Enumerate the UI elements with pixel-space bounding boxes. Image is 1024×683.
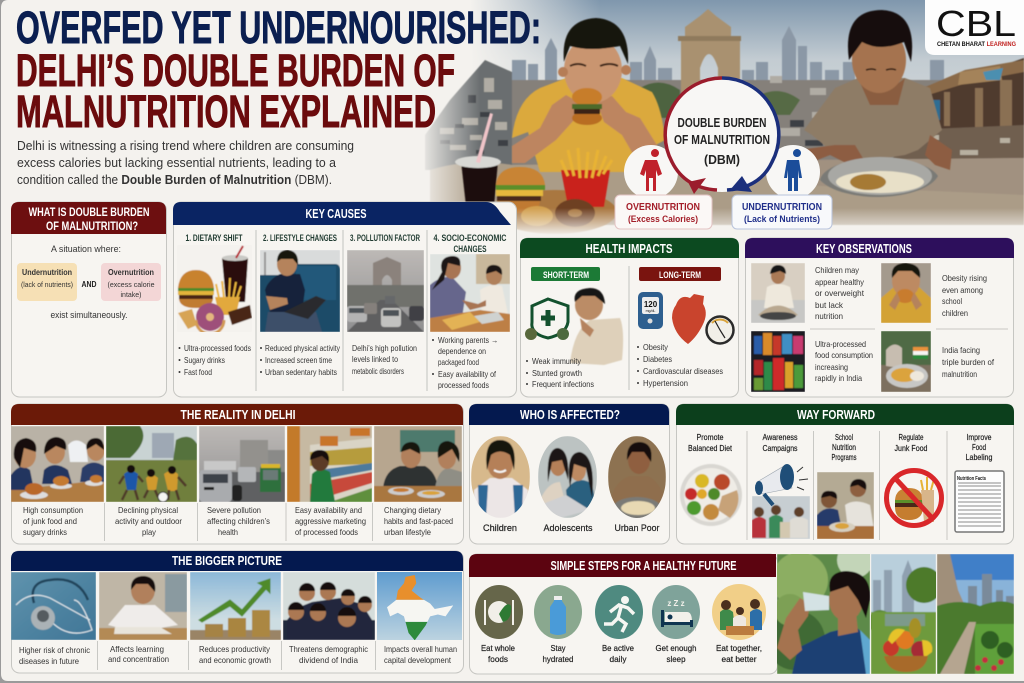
bullet list	[260, 343, 341, 377]
small circles	[624, 145, 820, 199]
junk food spread	[455, 113, 617, 234]
item: awareness campaigns: Campaigns	[762, 443, 798, 453]
title: OVERFED YET UNDERNOURISHED:	[16, 2, 541, 53]
portrait: adolescents: Adolescents	[544, 523, 593, 534]
captions: play	[142, 527, 157, 537]
captions: Severe pollution	[207, 505, 261, 515]
step: eat together: eat better	[722, 654, 757, 664]
overnutrition box: Overnutrition	[108, 267, 154, 277]
item: balanced diet	[680, 432, 742, 526]
observation: appear healthy: or overweight	[815, 288, 865, 298]
image: child in food store	[287, 426, 372, 502]
image: boy on tablet	[260, 250, 340, 332]
bullet list: packaged food	[438, 357, 479, 367]
observation: ultra-processed: food consumption	[815, 350, 873, 360]
bullet list: dependence on	[438, 346, 486, 356]
column: dietary shift: 1. DIETARY SHIFT	[186, 233, 243, 243]
undernutrition label: (Lack of Nutrients)	[744, 214, 820, 225]
bullet list	[637, 342, 723, 388]
captions: affecting children’s	[207, 516, 270, 526]
pollution text	[352, 343, 417, 376]
bullet list	[178, 343, 251, 377]
DBM diagram	[615, 78, 832, 229]
panel: what is double burden: OF MALNUTRITION?	[46, 221, 138, 233]
bullet list: processed foods	[438, 380, 489, 390]
captions: aggressive marketing	[295, 516, 366, 526]
image: smog and traffic	[347, 250, 424, 332]
boy undernourished	[798, 10, 952, 197]
column: pollution factor: 3. POLLUTION FACTOR	[350, 233, 420, 243]
step: stay hydrated: Stay	[550, 643, 566, 653]
boy overfed	[512, 18, 665, 172]
observation: appear healthy	[751, 263, 865, 323]
image: pollution and traffic	[199, 426, 285, 502]
distant skyline	[512, 26, 944, 92]
item: regulate junk food	[886, 432, 942, 526]
bullet list: Weak immunity	[532, 356, 582, 366]
city mass	[512, 80, 1024, 165]
bullet list: Frequent infections	[532, 379, 594, 389]
panel: simple steps: SIMPLE STEPS FOR A HEALTHY FUTURE	[550, 558, 737, 573]
pollution text: Delhi’s high pollution	[352, 343, 417, 353]
hero illustration	[418, 0, 1024, 236]
portrait: children	[471, 436, 530, 534]
pollution text: metabolic disorders	[352, 366, 404, 376]
bullet list	[526, 356, 594, 389]
item: regulate junk food: Regulate	[898, 432, 924, 442]
captions: of junk food and	[23, 516, 77, 526]
image: india map	[377, 572, 462, 640]
bullet list: Hypertension	[643, 378, 688, 388]
icon: nutrition label: Nutrition Facts	[957, 476, 986, 482]
item: awareness campaigns	[752, 432, 810, 539]
column: socio-economic changes: CHANGES	[454, 244, 486, 254]
short-term column	[525, 267, 623, 389]
panel: who is affected	[469, 404, 670, 544]
image: stethoscope	[11, 572, 96, 640]
image: parent and child	[430, 254, 510, 332]
title	[16, 2, 541, 137]
step: be active: daily	[610, 654, 627, 664]
column: lifestyle changes	[260, 233, 341, 377]
icon: food plate	[680, 464, 742, 526]
observation: triple burden: triple burden of	[942, 357, 995, 367]
india gate	[681, 9, 740, 93]
observation: ultra-processed	[751, 331, 873, 392]
undernutrition box: Undernutrition	[22, 267, 72, 277]
intro paragraph: condition called the Double Burden of Malnutrition (DBM).	[17, 173, 332, 187]
portrait: children: Children	[483, 523, 517, 534]
panel: health impacts: HEALTH IMPACTS	[586, 241, 673, 256]
item: regulate junk food: Junk Food	[894, 443, 928, 453]
observation: obesity in school: even among	[942, 285, 983, 295]
bullet list: Easy availability of	[438, 369, 496, 379]
logo: CHETAN BHARAT LEARNING	[937, 41, 1016, 48]
bullet list	[432, 335, 498, 390]
undernutrition label: UNDERNUTRITION	[742, 201, 822, 213]
captions: of processed foods	[295, 527, 358, 537]
observation: appear healthy: appear healthy	[815, 277, 865, 287]
captions	[23, 505, 453, 537]
step: stay hydrated	[534, 585, 582, 664]
panel: the reality in delhi: THE REALITY IN DELHI	[180, 407, 296, 422]
undernutrition box: (lack of nutrients)	[21, 280, 73, 289]
panel: what is double burden: exist simultaneously.	[50, 310, 128, 321]
bullet list: Sugary drinks	[184, 355, 225, 365]
observation: ultra-processed: increasing	[815, 362, 848, 372]
item: school nutrition	[817, 432, 874, 539]
column: socio-economic changes: 4. SOCIO-ECONOMIC	[434, 233, 507, 243]
undernutrition label	[732, 195, 832, 229]
panel: health impacts	[520, 238, 739, 397]
icon: megaphone	[755, 464, 808, 505]
captions: habits and fast-paced	[384, 516, 453, 526]
slum	[905, 58, 1024, 165]
captions	[19, 644, 457, 666]
panel: the bigger picture: THE BIGGER PICTURE	[172, 553, 282, 568]
captions: dividend of India	[299, 655, 358, 665]
image: child studying	[99, 572, 187, 640]
column: dietary shift	[177, 233, 252, 377]
step: enough sleep: Get enough	[656, 643, 697, 653]
long-term column: LONG-TERM	[659, 270, 701, 280]
panel: the bigger picture	[11, 551, 464, 673]
observation: appear healthy: but lack	[815, 300, 844, 310]
pollution text: levels linked to	[352, 354, 398, 364]
portrait: adolescents	[538, 436, 597, 534]
observation: ultra-processed: rapidly in India	[815, 373, 862, 383]
bullet list: Reduced physical activity	[265, 343, 341, 353]
panel: simple steps	[469, 554, 778, 674]
observation: appear healthy: nutrition	[815, 311, 843, 321]
observation: obesity in school: children	[942, 308, 968, 318]
image: children playing football	[106, 426, 197, 502]
observation: obesity in school	[881, 263, 987, 323]
panel: what is double burden: WHAT IS DOUBLE BURDEN	[28, 207, 150, 219]
step: eat whole foods: Eat whole	[481, 643, 515, 653]
image: school meal	[817, 472, 874, 539]
image: boy drinking water	[777, 554, 870, 674]
image: coins and growth arrow	[190, 572, 281, 640]
observation: appear healthy: Children may	[815, 265, 860, 275]
panel: what is double burden: AND	[82, 279, 96, 289]
panel: the reality in delhi	[11, 404, 464, 544]
overnutrition label: OVERNUTRITION	[626, 201, 700, 213]
DBM diagram: (DBM)	[704, 152, 740, 167]
image: junk food	[177, 245, 252, 332]
captions: activity and outdoor	[115, 516, 182, 526]
step: eat together: Eat together,	[716, 643, 762, 653]
item: awareness campaigns: Awareness	[762, 432, 798, 442]
step: eat whole foods: foods	[488, 654, 508, 664]
item: school nutrition: Programs	[832, 452, 856, 462]
panel: key observations: KEY OBSERVATIONS	[816, 241, 912, 256]
image: campaign group	[752, 496, 810, 539]
panel: key causes: KEY CAUSES	[306, 206, 367, 221]
bullet list: Ultra-processed foods	[184, 343, 251, 353]
step: be active	[595, 585, 643, 664]
step: stay hydrated: hydrated	[542, 654, 574, 664]
column: pollution factor	[347, 233, 424, 376]
DBM diagram: OF MALNUTRITION	[674, 132, 770, 147]
step: enough sleep: sleep	[666, 654, 686, 664]
item: food labeling: Food	[972, 442, 986, 452]
overnutrition box: (excess calorie	[108, 280, 154, 289]
observation: triple burden: malnutrition	[942, 369, 977, 379]
captions: urban lifestyle	[384, 527, 431, 537]
bullet list: Diabetes	[643, 354, 672, 364]
panel: key observations	[745, 238, 1014, 397]
captions: Threatens demographic	[289, 644, 369, 654]
observation: ultra-processed: Ultra-processed	[815, 339, 866, 349]
captions: sugary drinks	[23, 527, 67, 537]
panel: way forward	[676, 404, 1014, 544]
icon: no junk food	[886, 470, 942, 526]
intro paragraph	[17, 139, 354, 187]
captions: Easy availability and	[295, 505, 362, 515]
step: be active: Be active	[602, 643, 634, 653]
observation: obesity in school: Obesity rising	[942, 273, 987, 283]
item: food labeling: Improve	[966, 432, 992, 442]
undernutrition box	[17, 263, 77, 301]
bullet list: Cardiovascular diseases	[643, 366, 723, 376]
step: enough sleep	[652, 585, 700, 664]
overnutrition box	[101, 263, 161, 301]
logo: CBL	[936, 3, 1016, 44]
portrait: urban poor	[608, 436, 666, 534]
item: school nutrition: School	[835, 432, 853, 442]
panel: what is double burden: A situation where:	[51, 244, 121, 255]
panel: key causes	[173, 202, 516, 397]
image: family at table	[374, 426, 462, 502]
step: enough sleep: z Z z	[667, 599, 685, 608]
captions: Impacts overall human	[384, 644, 457, 654]
captions: and concentration	[108, 654, 169, 664]
captions: Declining physical	[118, 505, 178, 515]
short-term column: SHORT-TERM	[543, 270, 589, 280]
title: DELHI’S DOUBLE BURDEN OF	[16, 45, 455, 96]
bullet list: Stunted growth	[532, 368, 582, 378]
table	[430, 158, 1024, 225]
captions: health	[218, 527, 238, 537]
portrait: urban poor: Urban Poor	[614, 523, 660, 534]
long-term column	[637, 267, 734, 388]
column: socio-economic changes	[430, 233, 510, 390]
bullet list: Urban sedentary habits	[265, 367, 337, 377]
title: MALNUTRITION EXPLAINED	[16, 86, 436, 137]
captions: Reduces productivity	[199, 644, 271, 654]
overnutrition label	[615, 195, 712, 229]
intro paragraph: excess calories but lacking essential nutrients, leading to a	[17, 156, 336, 170]
observation: triple burden	[881, 331, 995, 392]
image: green city park	[937, 554, 1014, 674]
image: coughing child	[570, 288, 623, 365]
overnutrition label: (Excess Calories)	[628, 214, 698, 225]
logo	[925, 0, 1024, 55]
captions: Affects learning	[110, 644, 164, 654]
DBM diagram: DOUBLE BURDEN	[678, 115, 766, 130]
icon: female figure	[640, 149, 662, 191]
item: food labeling: Labeling	[966, 452, 993, 462]
captions: capital development	[384, 655, 452, 665]
bullet list: Working parents →	[438, 335, 498, 345]
item: school nutrition: Nutrition	[832, 442, 856, 452]
step: eat together	[712, 584, 766, 664]
item: balanced diet: Promote	[696, 432, 724, 442]
captions: Changing dietary	[384, 505, 442, 515]
item: food labeling	[955, 432, 1004, 532]
overnutrition box: intake)	[120, 290, 142, 299]
observation: obesity in school: school	[942, 296, 962, 306]
panel: what is double burden	[11, 202, 166, 397]
icon: heart	[672, 294, 706, 344]
bullet list: Fast food	[184, 367, 212, 377]
captions: and economic growth	[199, 655, 271, 665]
captions: diseases in future	[19, 656, 79, 666]
step: eat whole foods	[475, 585, 523, 664]
image: fruit basket and skyline	[871, 554, 936, 674]
captions: High consumption	[23, 505, 83, 515]
column: lifestyle changes: 2. LIFESTYLE CHANGES	[263, 233, 337, 243]
observation: triple burden: India facing	[942, 345, 980, 355]
bullet list: Increased screen time	[265, 355, 332, 365]
image: students eating junk food	[11, 426, 104, 502]
icon: glucose meter	[638, 292, 663, 329]
image: group of children	[283, 572, 375, 640]
panel: way forward: WAY FORWARD	[797, 407, 875, 422]
panel: who is affected: WHO IS AFFECTED?	[520, 407, 620, 422]
intro paragraph: Delhi is witnessing a rising trend where children are consuming	[17, 139, 354, 153]
icon: gauge	[706, 316, 734, 344]
captions: Higher risk of chronic	[19, 645, 91, 655]
item: balanced diet: Balanced Diet	[688, 443, 732, 453]
bullet list: Obesity	[643, 342, 669, 352]
icon: glucose meter: mg/dL	[646, 309, 655, 313]
icon: shield and viruses	[525, 299, 569, 340]
icon: male figure	[784, 149, 802, 191]
icon: glucose meter: 120	[644, 300, 658, 309]
